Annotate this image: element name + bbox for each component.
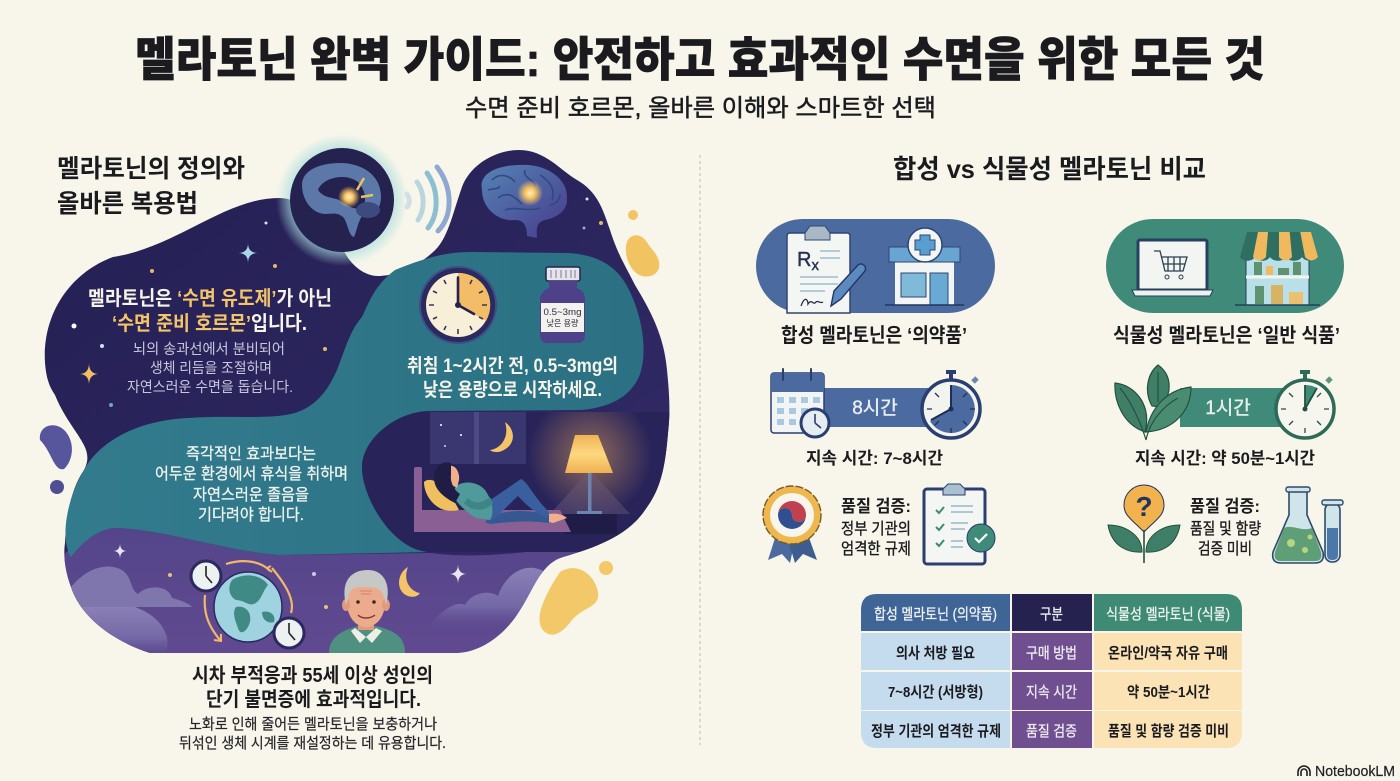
pill: pharmaceutical icons [756, 219, 995, 313]
left heading [57, 155, 245, 218]
icon: leaves [1115, 365, 1191, 440]
text block: jet lag and insomnia: 뒤섞인 생체 시계를 재설정하는 데 유용합니다. [179, 735, 446, 752]
icon: brain cross-section with pineal gland [276, 134, 408, 266]
label: plant is a general food: 식물성 멜라토닌은 ‘일반 식품’ [1113, 324, 1340, 347]
NotebookLM watermark: NotebookLM [1315, 764, 1395, 780]
pill: general food icons [1106, 219, 1344, 313]
text block: bedtime dosage [407, 355, 618, 401]
illustration: person resting in dark bedroom [362, 412, 670, 552]
text block: quality verification plant: 품질 검증: [1190, 497, 1260, 516]
table column: synthetic: 7~8시간 (서방형) [888, 684, 983, 701]
decorative blob shapes [40, 210, 659, 635]
text block: quality verification plant: 검증 미비 [1198, 540, 1252, 558]
table column: synthetic: 정부 기관의 엄격한 규제 [871, 723, 1001, 740]
icon: radio waves [407, 167, 449, 231]
text block: melatonin is a sleep preparation hormone: 생체 리듬을 조절하며 [150, 360, 272, 377]
table column: category: 구분 [1040, 606, 1063, 623]
icon: checklist clipboard [924, 484, 995, 564]
text block: melatonin is a sleep preparation hormone [88, 287, 332, 396]
duration graphic: synthetic 8 hours [771, 369, 980, 438]
icon: medicine bottle 0.5~3mg: 0.5~3mg [544, 307, 582, 317]
table column: synthetic: 의사 처방 필요 [896, 645, 975, 662]
table column: plant: 품질 및 함량 검증 미비 [1108, 723, 1229, 740]
table column: category [1012, 594, 1092, 748]
icon: medicine bottle 0.5~3mg [540, 267, 585, 343]
text block: jet lag and insomnia: 단기 불면증에 효과적입니다. [206, 688, 421, 711]
purple lower band with clouds [64, 528, 600, 653]
icon: laptop with shopping cart [1132, 240, 1213, 296]
table column: category: 지속 시간 [1026, 684, 1077, 701]
icon: medicine bottle 0.5~3mg: 낮은 용량 [546, 318, 579, 328]
icon: flask and test tube [1273, 487, 1343, 563]
text block: melatonin is a sleep preparation hormone: 자연스러운 수면을 돕습니다. [127, 379, 293, 396]
icon: pharmacy building [885, 228, 964, 305]
text block: wait for natural drowsiness: 어두운 환경에서 휴식을 취하며 [155, 465, 348, 483]
table column: synthetic [861, 594, 1010, 748]
title: 멜라토닌 완벽 가이드: 안전하고 효과적인 수면을 위한 모든 것 [135, 33, 1265, 86]
icon: question mark plant: ? [1135, 491, 1153, 522]
icon: stopwatch 8 hours [922, 372, 980, 438]
label: duration plant: 지속 시간: 약 50분~1시간 [1135, 449, 1315, 468]
text block: melatonin is a sleep preparation hormone: ‘수면 준비 호르몬’입니다. [112, 312, 307, 335]
text block: wait for natural drowsiness: 기다려야 합니다. [198, 506, 304, 524]
illustration: globe with clocks for jet lag [191, 561, 304, 648]
table column: plant [1094, 594, 1242, 748]
label: duration synthetic: 지속 시간: 7~8시간 [806, 449, 943, 468]
table column: plant: 온라인/약국 자유 구매 [1108, 645, 1228, 662]
text block: melatonin is a sleep preparation hormone: 뇌의 송과선에서 분비되어 [133, 341, 285, 358]
table column: category: 품질 검증 [1026, 723, 1077, 740]
duration graphic: plant 1 hour [1115, 365, 1334, 440]
table column: plant: 식물성 멜라토닌 (식물) [1106, 606, 1230, 623]
text block: quality verification synthetic [841, 497, 911, 558]
icon: glowing brain [482, 165, 567, 238]
duration graphic: synthetic 8 hours: 8시간 [852, 397, 898, 419]
stars and dots [72, 198, 603, 407]
subtitle: 수면 준비 호르몬, 올바른 이해와 스마트한 선택 [465, 95, 936, 122]
icon: prescription clipboard [787, 226, 865, 313]
icon: clock [420, 267, 496, 343]
main night blob [45, 150, 669, 653]
text block: wait for natural drowsiness [155, 445, 348, 524]
text block: quality verification plant [1190, 497, 1261, 558]
comparison table [861, 594, 1242, 748]
panel: synthetic vs plant comparison [756, 154, 1344, 748]
text block: bedtime dosage: 취침 1~2시간 전, 0.5~3mg의 [407, 355, 618, 377]
icon: prescription clipboard: R [797, 249, 811, 271]
left heading: 올바른 복용법 [57, 190, 198, 218]
teal band [65, 252, 644, 557]
table column: plant: 약 50분~1시간 [1127, 684, 1210, 701]
icon: stopwatch 1 hour [1276, 372, 1334, 438]
text block: jet lag and insomnia: 시차 부적응과 55세 이상 성인의 [192, 664, 433, 687]
icon: prescription clipboard: x [811, 257, 819, 274]
table column: synthetic: 합성 멜라토닌 (의약품) [874, 606, 997, 623]
illustration: older man with moon and stars [113, 543, 467, 653]
text block: quality verification synthetic: 정부 기관의 [841, 520, 911, 538]
icon: question mark plant [1108, 485, 1180, 563]
duration graphic: plant 1 hour: 1시간 [1205, 397, 1251, 419]
text block: jet lag and insomnia: 노화로 인해 줄어든 멜라토닌을 보충하거나 [189, 716, 437, 733]
text block: quality verification synthetic: 품질 검증: [841, 497, 911, 516]
label: synthetic is a drug: 합성 멜라토닌은 ‘의약품’ [781, 324, 967, 347]
icon: shop with awning [1235, 232, 1320, 305]
left heading: 멜라토닌의 정의와 [57, 155, 245, 183]
right heading: 합성 vs 식물성 멜라토닌 비교 [893, 154, 1206, 184]
text block: wait for natural drowsiness: 즉각적인 효과보다는 [186, 445, 316, 463]
icon: calendar [771, 369, 829, 437]
panel: melatonin definition and dosage [40, 134, 682, 752]
text block: wait for natural drowsiness: 자연스러운 졸음을 [193, 486, 309, 504]
icon: government certification medal [763, 486, 821, 563]
text block: bedtime dosage: 낮은 용량으로 시작하세요. [423, 379, 602, 401]
text block: jet lag and insomnia [179, 664, 446, 752]
text block: quality verification synthetic: 엄격한 규제 [841, 540, 911, 558]
table column: category: 구매 방법 [1026, 645, 1077, 662]
text block: melatonin is a sleep preparation hormone: 멜라토닌은 ‘수면 유도제’가 아닌 [88, 287, 332, 310]
text block: quality verification plant: 품질 및 함량 [1190, 520, 1261, 538]
